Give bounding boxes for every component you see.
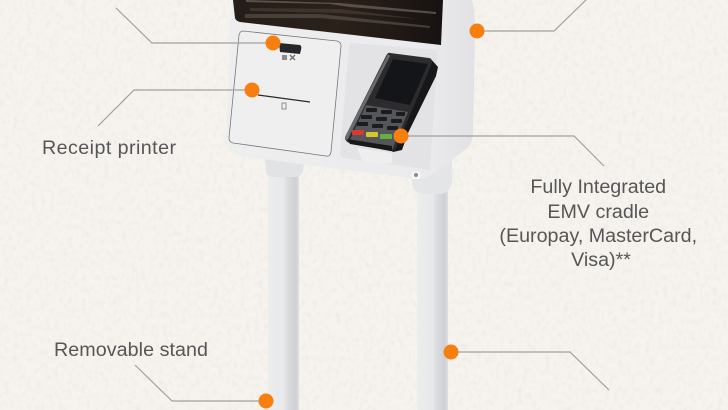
leader lines — [98, 0, 609, 401]
card reader slot — [279, 43, 301, 60]
label: EMV cradle: Visa)** — [571, 249, 631, 271]
right stand pole — [412, 155, 452, 410]
terminal side — [388, 58, 438, 152]
terminal left edge — [345, 54, 390, 141]
card terminal — [345, 53, 438, 152]
marker: removable stand — [258, 394, 274, 408]
EMV cradle — [340, 43, 438, 170]
label: EMV cradle: (Europay, MasterCard, — [499, 225, 697, 247]
receipt slot — [258, 95, 310, 109]
marker: EMV cradle — [394, 128, 408, 144]
card slot lip — [347, 139, 392, 151]
label: EMV cradle: EMV cradle — [547, 201, 649, 223]
marker: receipt printer — [244, 82, 260, 98]
label: receipt printer: Receipt printer — [42, 137, 176, 159]
keypad — [357, 108, 405, 130]
terminal screen — [375, 59, 428, 105]
keypad area — [349, 105, 408, 150]
terminal body — [345, 53, 432, 151]
keypad colored keys — [352, 130, 392, 139]
label: EMV cradle: Fully Integrated — [530, 176, 666, 198]
callout markers — [244, 24, 484, 408]
cradle lip — [357, 148, 392, 164]
left stand pole — [265, 158, 304, 410]
marker: top right body — [470, 24, 484, 38]
kiosk device — [226, 0, 475, 410]
marker: card reader — [266, 36, 280, 50]
kiosk body — [226, 0, 475, 179]
marker: right stand — [444, 344, 458, 360]
receipt printer panel — [229, 31, 341, 156]
mounting screw — [412, 172, 420, 179]
touchscreen — [233, 0, 443, 45]
label: removable stand: Removable stand — [54, 339, 208, 361]
